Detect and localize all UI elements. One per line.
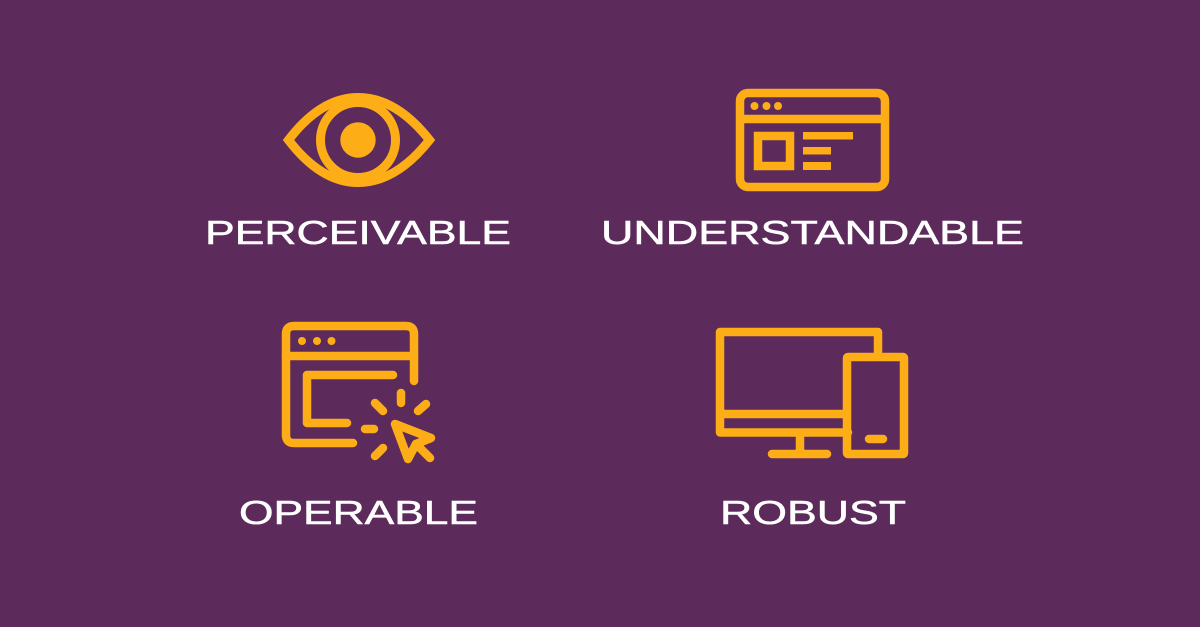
panel: operable bbox=[239, 326, 478, 532]
icon: browser window with clicking cursor bbox=[286, 326, 431, 459]
heading: understandable: UNDERSTANDABLE bbox=[601, 215, 1024, 252]
panel: perceivable bbox=[205, 98, 511, 252]
heading: perceivable: PERCEIVABLE bbox=[205, 215, 511, 252]
panel: robust bbox=[720, 332, 906, 532]
heading: operable: OPERABLE bbox=[239, 495, 478, 532]
icon: eye bbox=[288, 98, 430, 182]
icon: desktop monitor and phone bbox=[720, 332, 904, 454]
heading: robust: ROBUST bbox=[720, 495, 906, 532]
icon: browser window with content layout bbox=[740, 93, 885, 187]
panel: understandable bbox=[601, 93, 1024, 252]
